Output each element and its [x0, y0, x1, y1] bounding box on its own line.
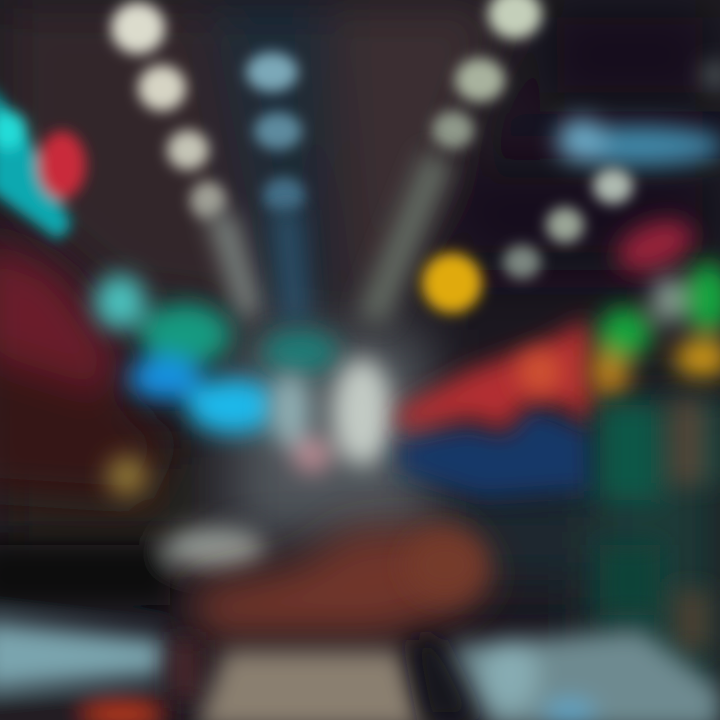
bottom right pale blue desk [450, 630, 720, 720]
right row of ceiling lights [358, 0, 542, 325]
teal glow at vanishing point [262, 330, 338, 374]
left sign: cyan and red [0, 85, 86, 240]
center row of blue lights [246, 52, 310, 325]
hand [170, 525, 495, 700]
center cyan and green screens [94, 274, 278, 434]
right colored bars [518, 262, 720, 398]
bottom center: tan surface [195, 650, 425, 720]
left wall: maroon awning [0, 235, 170, 500]
left row of ceiling lights [111, 2, 262, 320]
right lower columns [600, 400, 720, 650]
area chart: blue [400, 405, 592, 498]
top right blue sign [556, 64, 720, 166]
bottom left: dark band and pale blue band [0, 526, 265, 720]
bright center glow [270, 358, 392, 473]
red sign upper right [609, 210, 701, 282]
bottom center dark divider [410, 640, 480, 720]
area chart: red [398, 318, 592, 432]
diagonal lights at right [503, 168, 633, 279]
yellow round light [422, 253, 482, 313]
small amber light [106, 455, 148, 497]
